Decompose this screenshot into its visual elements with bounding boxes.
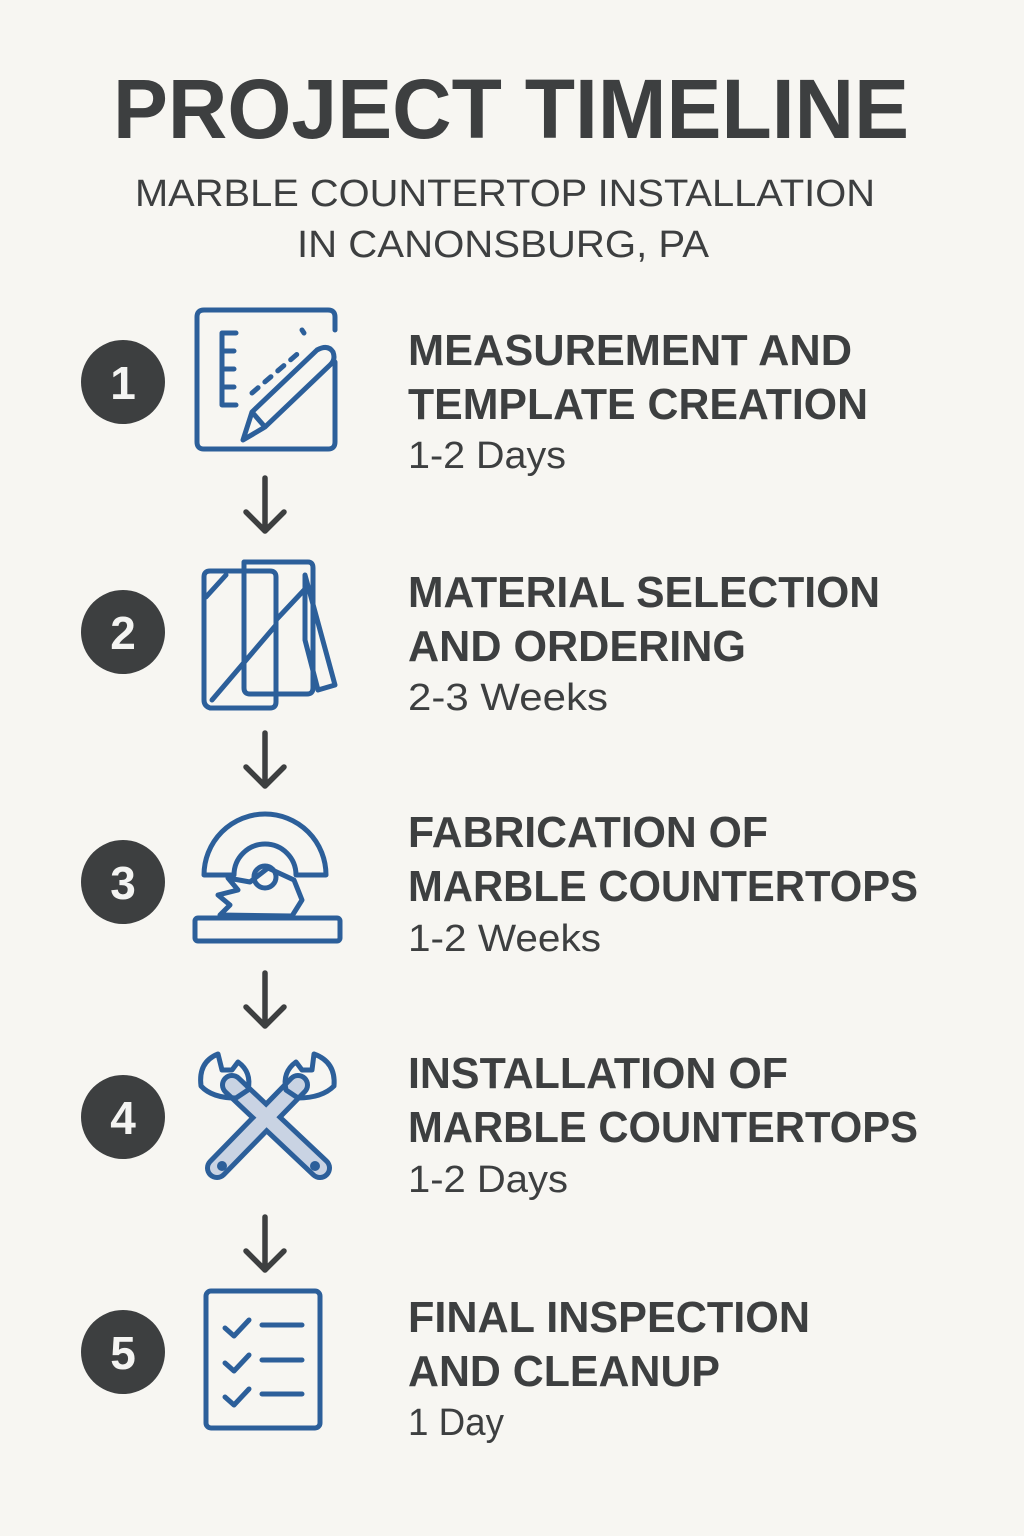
step 3 text: FABRICATION OF [408, 808, 768, 857]
step 2 text: 2-3 Weeks [408, 677, 608, 719]
number badge 4 [81, 1075, 165, 1159]
number badge 3: 3 [110, 857, 136, 909]
step 4 [81, 1049, 918, 1201]
subtitle: IN CANONSBURG, PA [297, 224, 710, 266]
arrow 2 [246, 733, 284, 786]
subtitle: MARBLE COUNTERTOP INSTALLATION [135, 173, 875, 215]
number badge 5 [81, 1310, 165, 1394]
step 4 text: INSTALLATION OF [408, 1049, 788, 1098]
step 4 text: 1-2 Days [408, 1159, 568, 1201]
step 3 [81, 808, 918, 960]
number badge 4: 4 [110, 1092, 136, 1144]
step 2 text [408, 568, 880, 719]
step 5 text: AND CLEANUP [408, 1347, 720, 1396]
step 4 text: MARBLE COUNTERTOPS [408, 1103, 918, 1152]
icon: marble slabs [204, 562, 335, 708]
step 1 text [408, 326, 868, 477]
step 5 [81, 1291, 810, 1444]
number badge 5: 5 [110, 1327, 136, 1379]
number badge 2: 2 [110, 607, 136, 659]
arrow 3 [246, 973, 284, 1026]
subtitle [135, 173, 875, 266]
icon: checklist [206, 1291, 320, 1428]
title: PROJECT TIMELINE [113, 62, 909, 156]
arrow 4 [246, 1217, 284, 1270]
step 3 text [408, 808, 918, 960]
number badge 2 [81, 590, 165, 674]
step 2 [81, 562, 880, 719]
number badge 3 [81, 840, 165, 924]
step 5 text: FINAL INSPECTION [408, 1293, 810, 1342]
step 1 text: 1-2 Days [408, 435, 566, 477]
step 1 text: TEMPLATE CREATION [408, 380, 868, 429]
step 1 text: MEASUREMENT AND [408, 326, 852, 375]
step 3 text: MARBLE COUNTERTOPS [408, 862, 918, 911]
step 1 [81, 310, 868, 477]
step 3 text: 1-2 Weeks [408, 918, 601, 960]
step 5 text: 1 Day [408, 1402, 504, 1444]
icon: crossed wrenches [201, 1054, 334, 1171]
arrow 1 [246, 478, 284, 531]
step 2 text: AND ORDERING [408, 622, 746, 671]
icon: circular saw [195, 814, 340, 941]
icon: template and pencil [197, 310, 335, 449]
number badge 1: 1 [110, 357, 136, 409]
step 4 text [408, 1049, 918, 1201]
step 2 text: MATERIAL SELECTION [408, 568, 880, 617]
step 5 text [408, 1293, 810, 1444]
number badge 1 [81, 340, 165, 424]
